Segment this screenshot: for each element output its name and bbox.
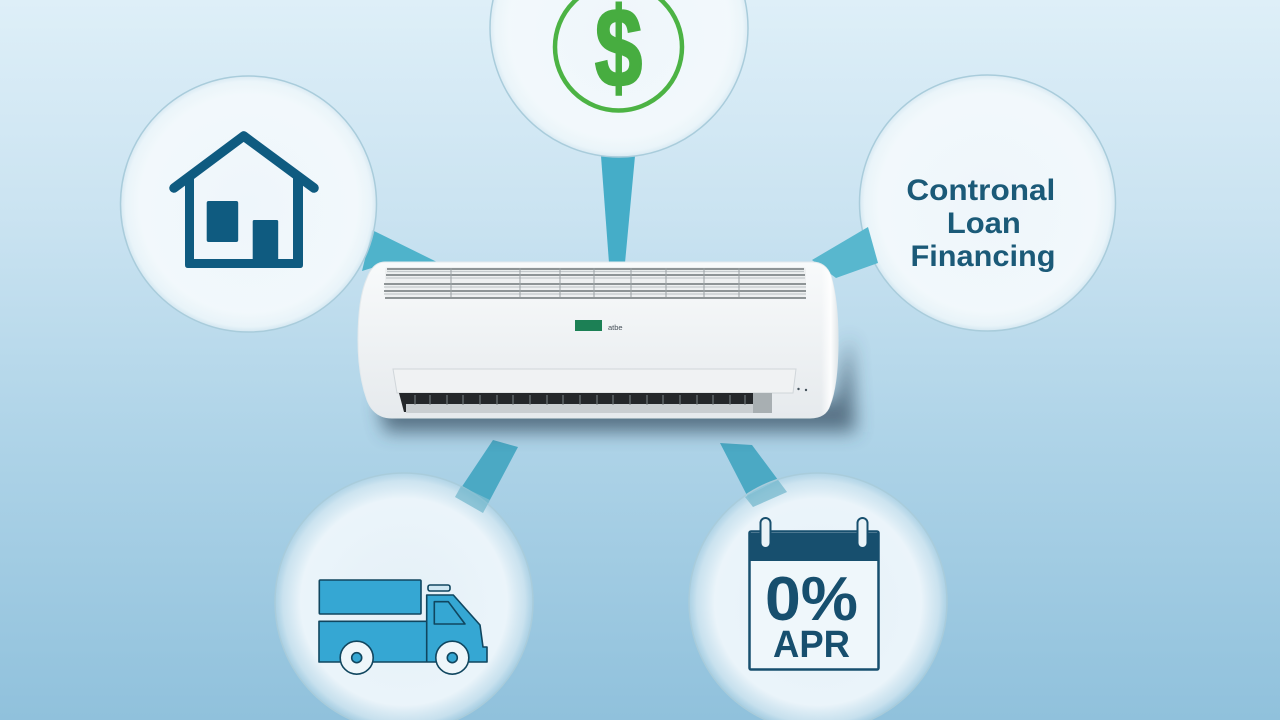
connector: right (812, 227, 878, 278)
text: loan financing: Loan (947, 207, 1021, 240)
icon: calendar: 0% (765, 565, 858, 634)
air conditioner unit (358, 262, 856, 432)
connector: bottom right (720, 443, 787, 507)
unit body (358, 262, 838, 418)
connector overlap: truck bubble (455, 486, 490, 513)
icon: calendar: APR (773, 624, 850, 666)
air vent louvers (399, 393, 772, 413)
top air grille (384, 267, 806, 298)
icon: house (174, 136, 314, 268)
display panel (575, 320, 602, 331)
bubble: house (120, 76, 376, 332)
bubble: loan financing (860, 75, 1116, 331)
text: loan financing: Financing (910, 240, 1056, 273)
bubble: zero percent APR (689, 473, 947, 720)
brand label: atbe (608, 323, 623, 332)
bubble: delivery truck (275, 473, 533, 720)
icon: calendar (749, 518, 879, 670)
connector: bottom left (455, 440, 518, 513)
connector: left (362, 230, 437, 271)
text: loan financing: Contronal (906, 174, 1055, 207)
icon: truck (319, 580, 487, 674)
icon: dollar coin (555, 0, 682, 111)
body rim highlight (358, 262, 838, 418)
connector: top (601, 156, 635, 263)
bubble: dollar (490, 0, 748, 157)
connector overlap: calendar bubble (745, 480, 787, 507)
front flap (393, 369, 796, 393)
indicator lights (797, 388, 807, 391)
